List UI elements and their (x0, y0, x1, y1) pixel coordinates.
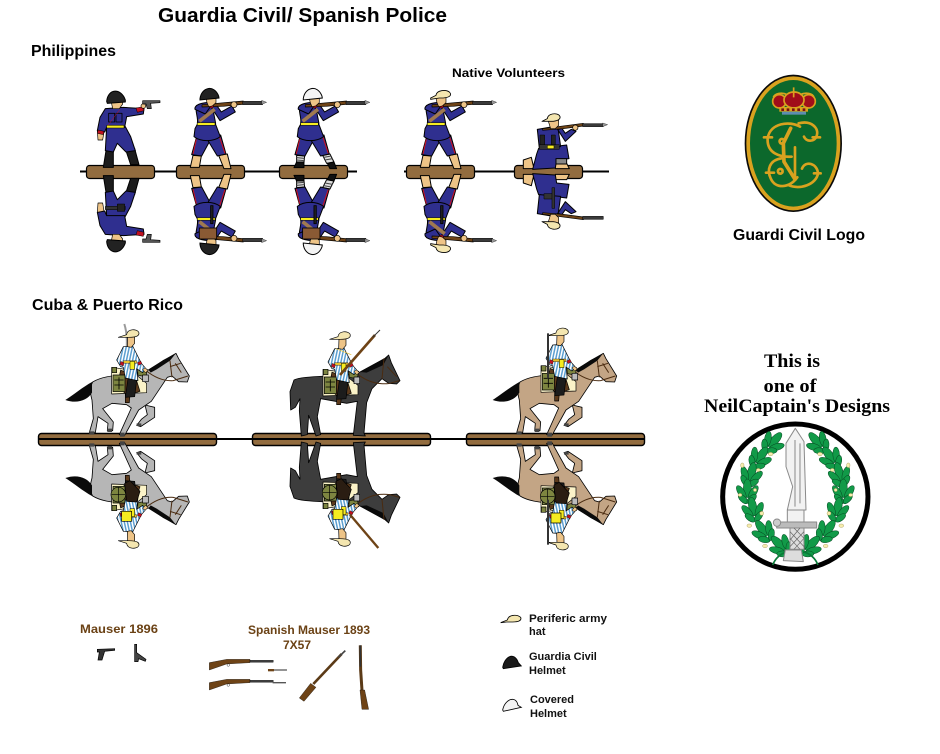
soldier: native volunteer kneeling (523, 114, 608, 169)
soldier: rifle, Guardia Civil helmet (190, 88, 267, 169)
icon: Spanish Mauser rifles and bayonets (209, 645, 369, 709)
legend: Guardia Civil helmet: Guardia Civil (529, 651, 597, 663)
logo caption: Guardi Civil Logo (733, 227, 865, 244)
cavalry: grey horse with sabre (65, 324, 189, 437)
legend: periferic army hat: Periferic army (529, 613, 608, 625)
mirrored native kneeling (523, 174, 603, 229)
icon: Guardia Civil logo (745, 75, 842, 212)
panel: Cuba and Puerto Rico cavalry (38, 324, 645, 550)
mirrored grey horse (65, 441, 189, 548)
credit text: NeilCaptain's Designs (704, 396, 890, 417)
legend: covered helmet: Covered (530, 694, 574, 706)
legend: periferic army hat: hat (529, 626, 546, 638)
cavalry: black horse with rifle (290, 330, 400, 436)
credit text: one of (764, 376, 817, 397)
title: Guardia Civil/ Spanish Police (158, 5, 447, 27)
knife (773, 428, 817, 562)
soldier: native volunteer standing (420, 90, 497, 169)
mirrored pistol soldier (97, 176, 160, 252)
mirrored native standing (420, 174, 497, 253)
wreath (734, 424, 856, 565)
credit text (704, 351, 890, 417)
ground line and bases (38, 434, 645, 446)
icon: Mauser 1896 pistols (97, 644, 146, 662)
icon: wreath and knife badge (723, 424, 868, 569)
label: Mauser 1896: Mauser 1896 (80, 622, 158, 636)
heading: Native Volunteers: Native Volunteers (452, 66, 565, 80)
panel: Philippines soldiers mirrored back view (97, 174, 603, 255)
mirrored rifle soldier covered helmet (294, 174, 370, 255)
label: Spanish Mauser 1893 7X57 (248, 623, 370, 652)
heading: Philippines: Philippines (31, 43, 116, 60)
legend: Guardia Civil helmet: Helmet (529, 665, 566, 677)
mirrored tan horse (493, 441, 617, 550)
label: Spanish Mauser 1893 7X57: 7X57 (283, 638, 311, 652)
label: Spanish Mauser 1893 7X57: Spanish Mauser 1893 (248, 623, 370, 637)
legend: Guardia Civil helmet (503, 651, 597, 677)
mirrored rifle soldier helmet (190, 174, 267, 255)
credit text: This is (764, 351, 820, 372)
mirrored cavalry (65, 441, 617, 550)
panel: Philippines soldiers (80, 88, 609, 178)
ground lines and bases (80, 166, 609, 178)
monogram GC (764, 123, 821, 187)
crown (773, 87, 815, 115)
legend: covered helmet (503, 694, 574, 720)
cavalry: tan horse with slung rifle (493, 328, 617, 437)
soldier: pistol, Guardia Civil helmet (97, 91, 160, 167)
heading: Cuba & Puerto Rico: Cuba & Puerto Rico (32, 297, 183, 314)
mirrored black horse (290, 442, 400, 548)
legend: covered helmet: Helmet (530, 708, 567, 720)
soldier: rifle, covered helmet (294, 88, 370, 169)
legend: periferic army hat (501, 613, 608, 638)
legend (501, 613, 608, 720)
